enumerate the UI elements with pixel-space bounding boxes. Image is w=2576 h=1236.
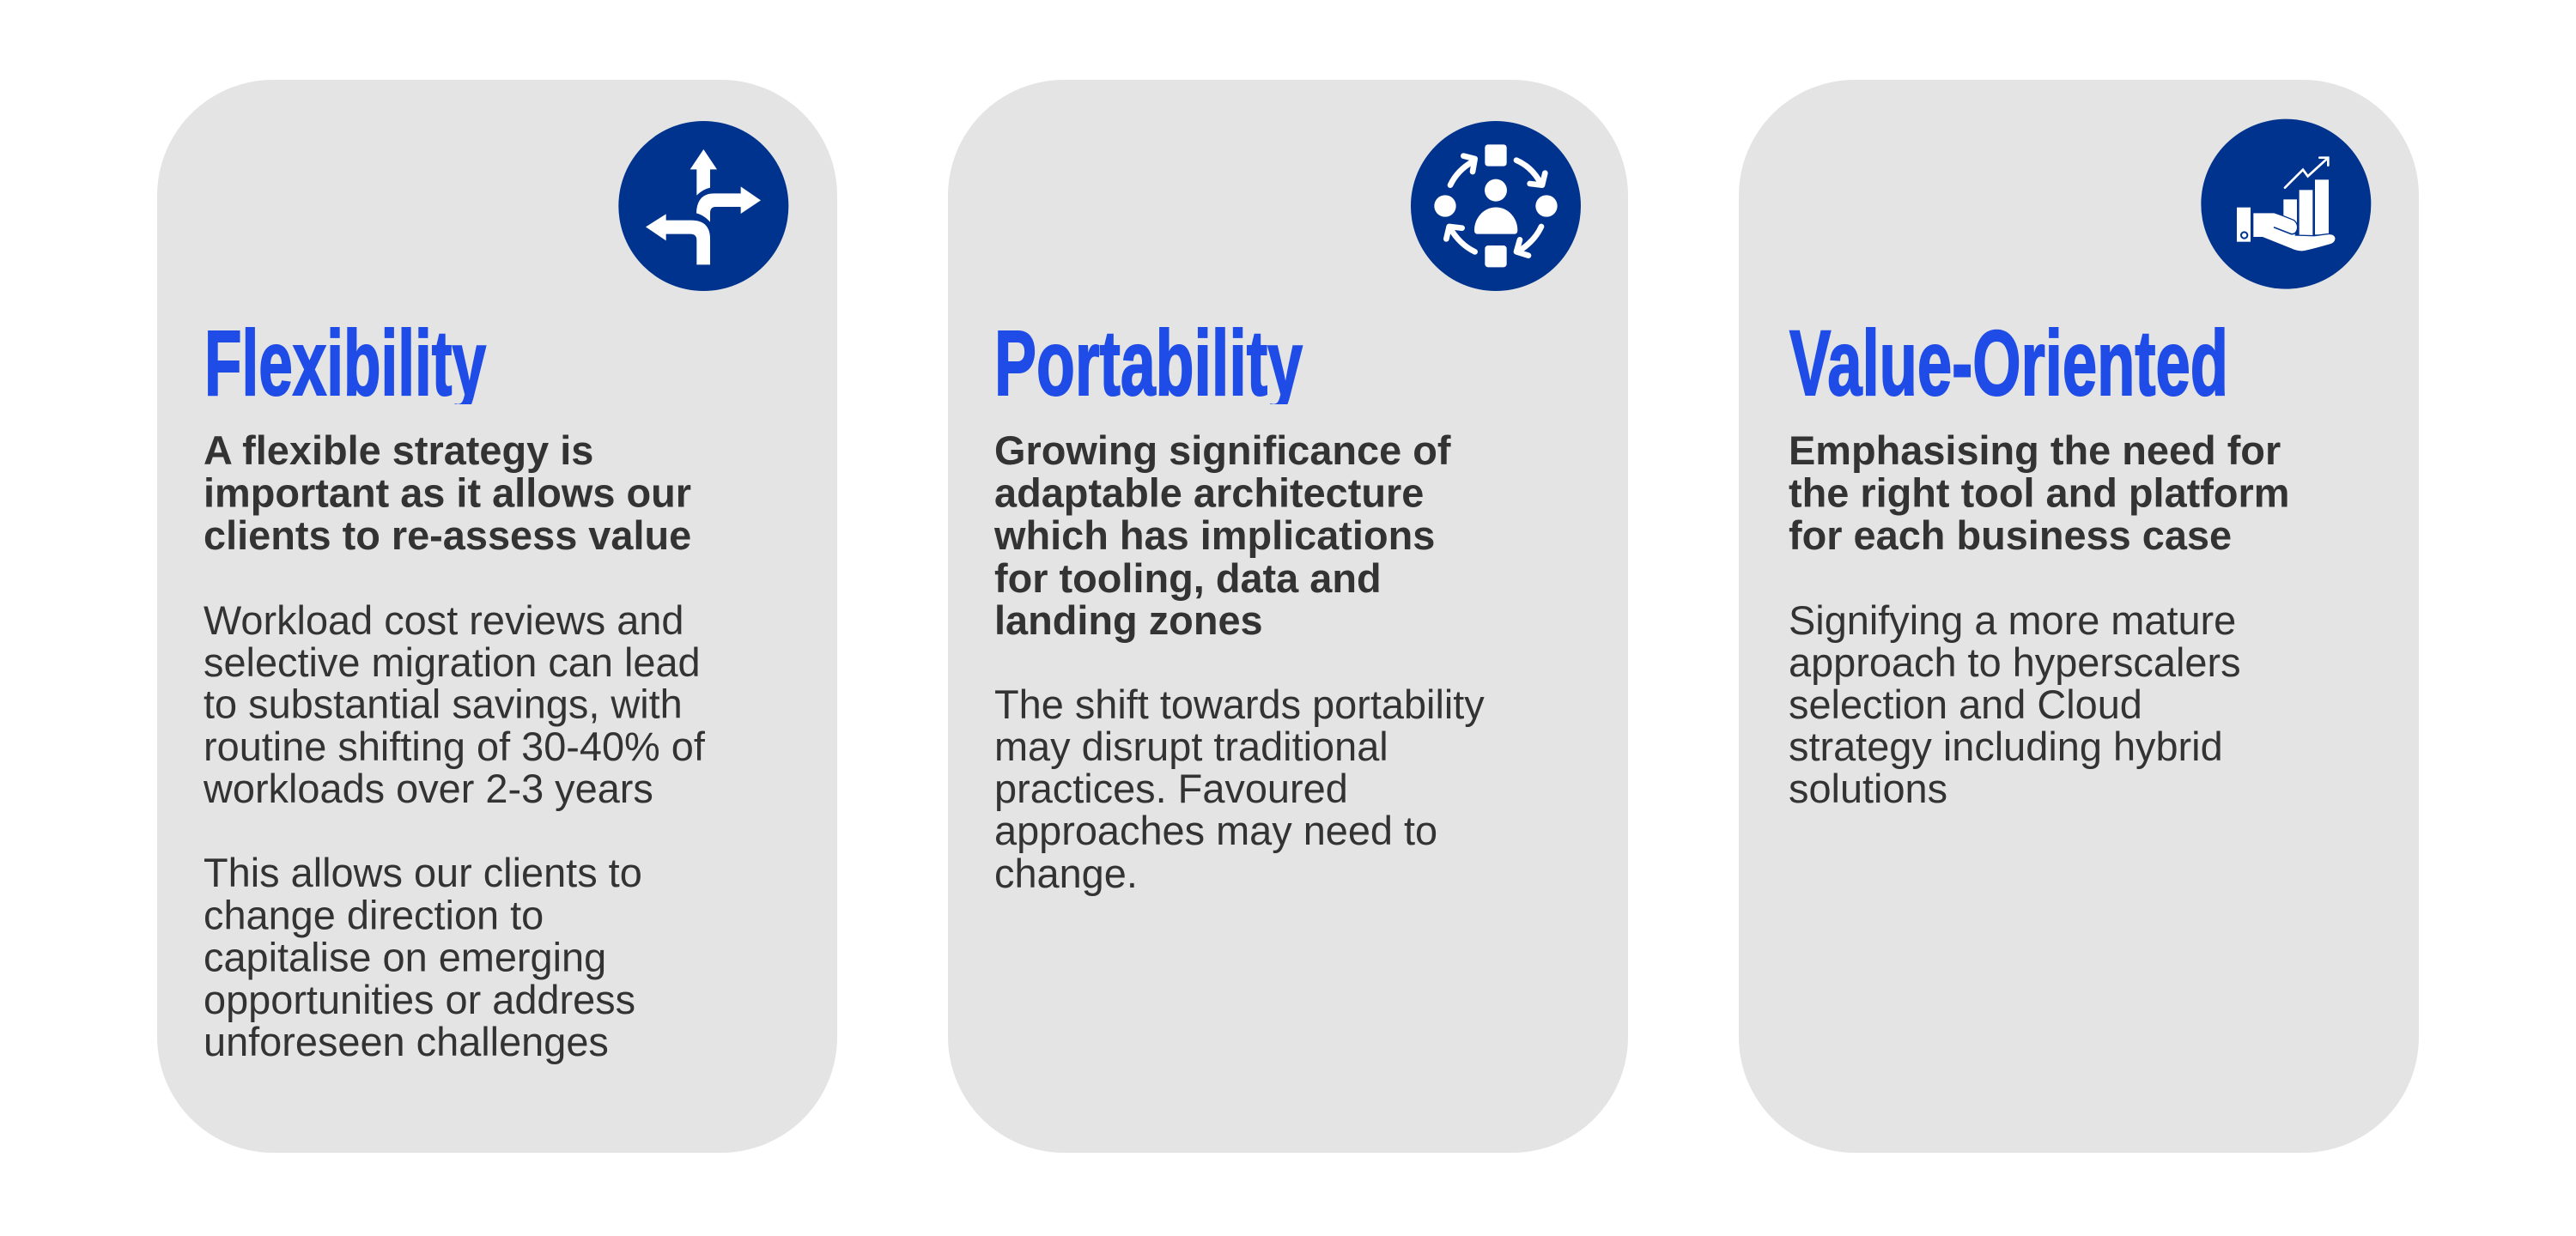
text block: Flexibility direction: capitalise on emerging	[204, 936, 606, 980]
text block: Portability lead: adaptable architecture	[994, 470, 1424, 515]
icon: diverging arrows	[618, 121, 788, 291]
text block: Flexibility lead: clients to re-assess value	[204, 513, 691, 558]
text block: Value-Oriented maturity: approach to hyperscalers	[1789, 640, 2241, 685]
text block: Portability shift: may disrupt traditional	[994, 724, 1388, 769]
text block: Flexibility savings: Workload cost reviews and	[204, 598, 683, 643]
heading: Flexibility: Flexibility	[204, 311, 486, 415]
text block: Portability lead: for tooling, data and	[994, 556, 1382, 601]
text block: Portability lead: which has implications	[993, 513, 1435, 558]
text block: Portability shift	[994, 682, 1485, 896]
text block: Portability shift: change.	[994, 851, 1138, 896]
text block: Flexibility savings: workloads over 2-3 years	[203, 766, 653, 811]
text block: Flexibility direction: This allows our clients to	[204, 851, 642, 895]
text block: Portability shift: The shift towards portability	[994, 682, 1485, 727]
panel: Portability	[948, 80, 1628, 1153]
text block: Value-Oriented lead	[1789, 428, 2289, 558]
text block: Flexibility lead: A flexible strategy is	[204, 428, 593, 473]
text block: Flexibility savings: selective migration can lead	[204, 640, 701, 685]
panel: Flexibility	[157, 80, 837, 1153]
text block: Flexibility direction: unforeseen challenges	[204, 1020, 609, 1064]
text block: Value-Oriented maturity: Signifying a more mature	[1789, 598, 2236, 643]
text block: Portability lead: landing zones	[994, 598, 1263, 643]
text block: Flexibility savings	[203, 598, 706, 811]
text block: Portability shift: approaches may need to	[994, 809, 1437, 853]
text block: Flexibility direction: change direction to	[204, 893, 544, 937]
icon: person in cycle	[1411, 121, 1581, 291]
text block: Portability lead	[993, 428, 1451, 643]
text block: Flexibility savings: routine shifting of 30-40% of	[204, 724, 706, 769]
icon: hand holding growth chart	[2201, 119, 2371, 289]
text block: Value-Oriented lead: for each business case	[1789, 513, 2232, 558]
text block: Value-Oriented maturity	[1789, 598, 2241, 811]
heading: Portability: Portability	[994, 311, 1303, 415]
text block: Flexibility lead	[204, 428, 691, 558]
text block: Flexibility direction	[204, 851, 642, 1064]
text block: Flexibility direction: opportunities or address	[204, 978, 635, 1022]
text block: Value-Oriented maturity: solutions	[1789, 766, 1947, 811]
text block: Value-Oriented maturity: strategy including hybrid	[1789, 724, 2223, 769]
text block: Flexibility savings: to substantial savings, with	[204, 682, 683, 726]
text block: Flexibility lead: important as it allows our	[204, 470, 691, 515]
heading: Value-Oriented: Value-Oriented	[1789, 311, 2228, 415]
text block: Value-Oriented lead: Emphasising the need for	[1789, 428, 2281, 473]
text block: Value-Oriented maturity: selection and Cloud	[1789, 682, 2142, 727]
panel: Value-Oriented	[1739, 80, 2419, 1153]
text block: Portability lead: Growing significance of	[994, 428, 1451, 473]
text block: Portability shift: practices. Favoured	[994, 766, 1348, 811]
text block: Value-Oriented lead: the right tool and platform	[1789, 470, 2289, 515]
